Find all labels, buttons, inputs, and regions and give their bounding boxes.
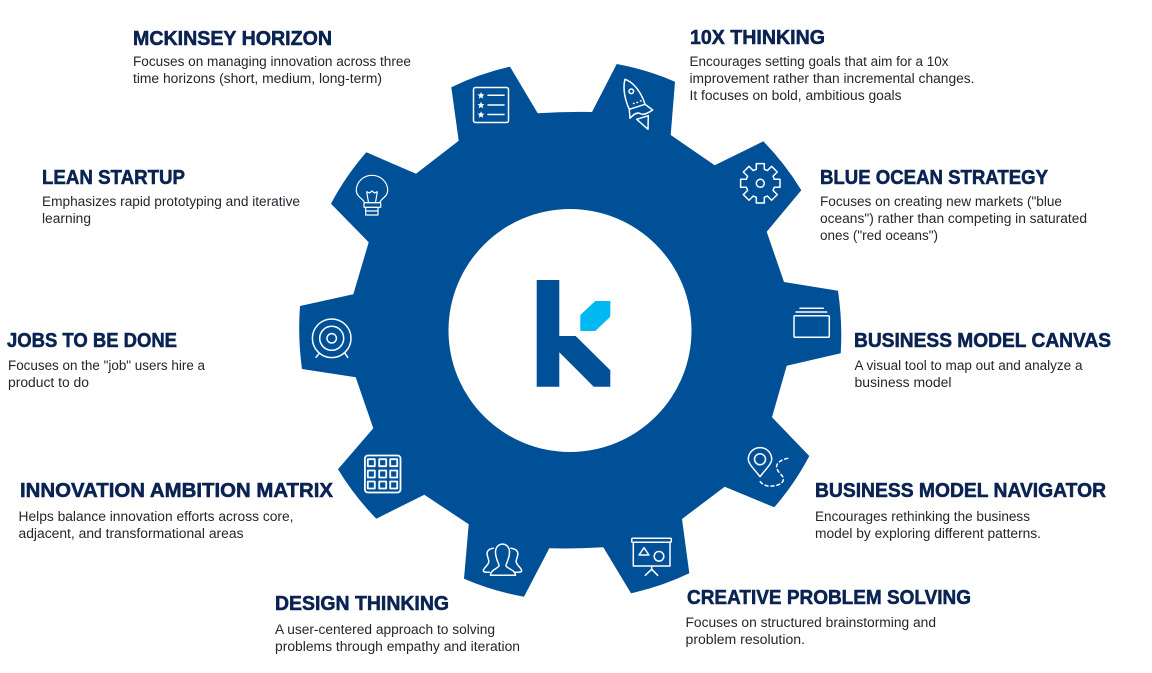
text: Business Model Navigator [815,480,1107,541]
icon: star list [474,88,508,122]
text: Creative Problem Solving [686,587,971,647]
text: Design Thinking: DESIGN THINKING [275,593,449,615]
text: McKinsey Horizon: Focuses on managing innovation across three [133,54,411,69]
text: 10X Thinking: 10X THINKING [690,27,825,49]
text: McKinsey Horizon [133,28,411,86]
text: Design Thinking: problems through empathy and iteration [275,639,520,654]
text: Creative Problem Solving: CREATIVE PROBLEM SOLVING [687,587,971,609]
gear wheel [299,64,841,597]
text: Blue Ocean Strategy: Focuses on creating new markets ("blue [820,194,1062,209]
text: Lean Startup: Emphasizes rapid prototyping and iterative [42,194,300,209]
icon: cog [741,164,780,203]
text: Blue Ocean Strategy: BLUE OCEAN STRATEGY [820,167,1049,189]
text: Blue Ocean Strategy [820,167,1087,243]
text: Innovation Ambition Matrix [18,480,334,541]
icon: canvas stack [794,308,829,337]
icon: target [312,319,351,358]
text: 10X Thinking: It focuses on bold, ambitious goals [690,88,902,103]
text: 10X Thinking [690,27,974,103]
text: Jobs To Be Done [7,330,206,390]
text: Lean Startup [42,167,300,226]
text: McKinsey Horizon: time horizons (short, medium, long-term) [133,71,382,86]
text: Jobs To Be Done: Focuses on the "job" users hire a [8,358,206,373]
text: Blue Ocean Strategy: ones ("red oceans") [820,228,938,243]
logo: k mark [537,280,610,387]
text: Innovation Ambition Matrix: adjacent, and transformational areas [18,526,244,541]
text: Design Thinking [275,593,520,654]
text: Business Model Navigator: BUSINESS MODEL NAVIGATOR [815,480,1107,502]
icon: map pin with route [748,448,788,486]
text: Creative Problem Solving: Focuses on structured brainstorming and [686,615,936,630]
text: Business Model Canvas: A visual tool to map out and analyze a [854,358,1083,373]
text: Business Model Navigator: Encourages rethinking the business [815,509,1030,524]
text: Innovation Ambition Matrix: Helps balance innovation efforts across core, [18,509,294,524]
text: 10X Thinking: Encourages setting goals that aim for a 10x [690,54,949,69]
text: Innovation Ambition Matrix: INNOVATION AMBITION MATRIX [20,480,334,502]
text: Business Model Canvas: BUSINESS MODEL CANVAS [854,330,1111,352]
text: Business Model Navigator: model by exploring different patterns. [815,526,1041,541]
icon: rocket [624,79,653,129]
text: Lean Startup: learning [42,211,91,226]
text: Lean Startup: LEAN STARTUP [42,167,185,189]
text: Jobs To Be Done: product to do [8,375,89,390]
text: 10X Thinking: improvement rather than incremental changes. [690,71,974,86]
text: Design Thinking: A user-centered approach to solving [275,622,495,637]
text: Business Model Canvas: business model [854,375,952,390]
text: McKinsey Horizon: MCKINSEY HORIZON [133,28,332,50]
icon: people group [483,544,522,575]
text: Jobs To Be Done: JOBS TO BE DONE [7,330,177,352]
icon: matrix grid [365,456,400,492]
text: Creative Problem Solving: problem resolution. [686,632,805,647]
icon: presentation board [632,538,671,575]
text: Business Model Canvas [854,330,1111,390]
icon: light bulb [356,175,388,215]
text: Blue Ocean Strategy: oceans") rather than competing in saturated [820,211,1087,226]
